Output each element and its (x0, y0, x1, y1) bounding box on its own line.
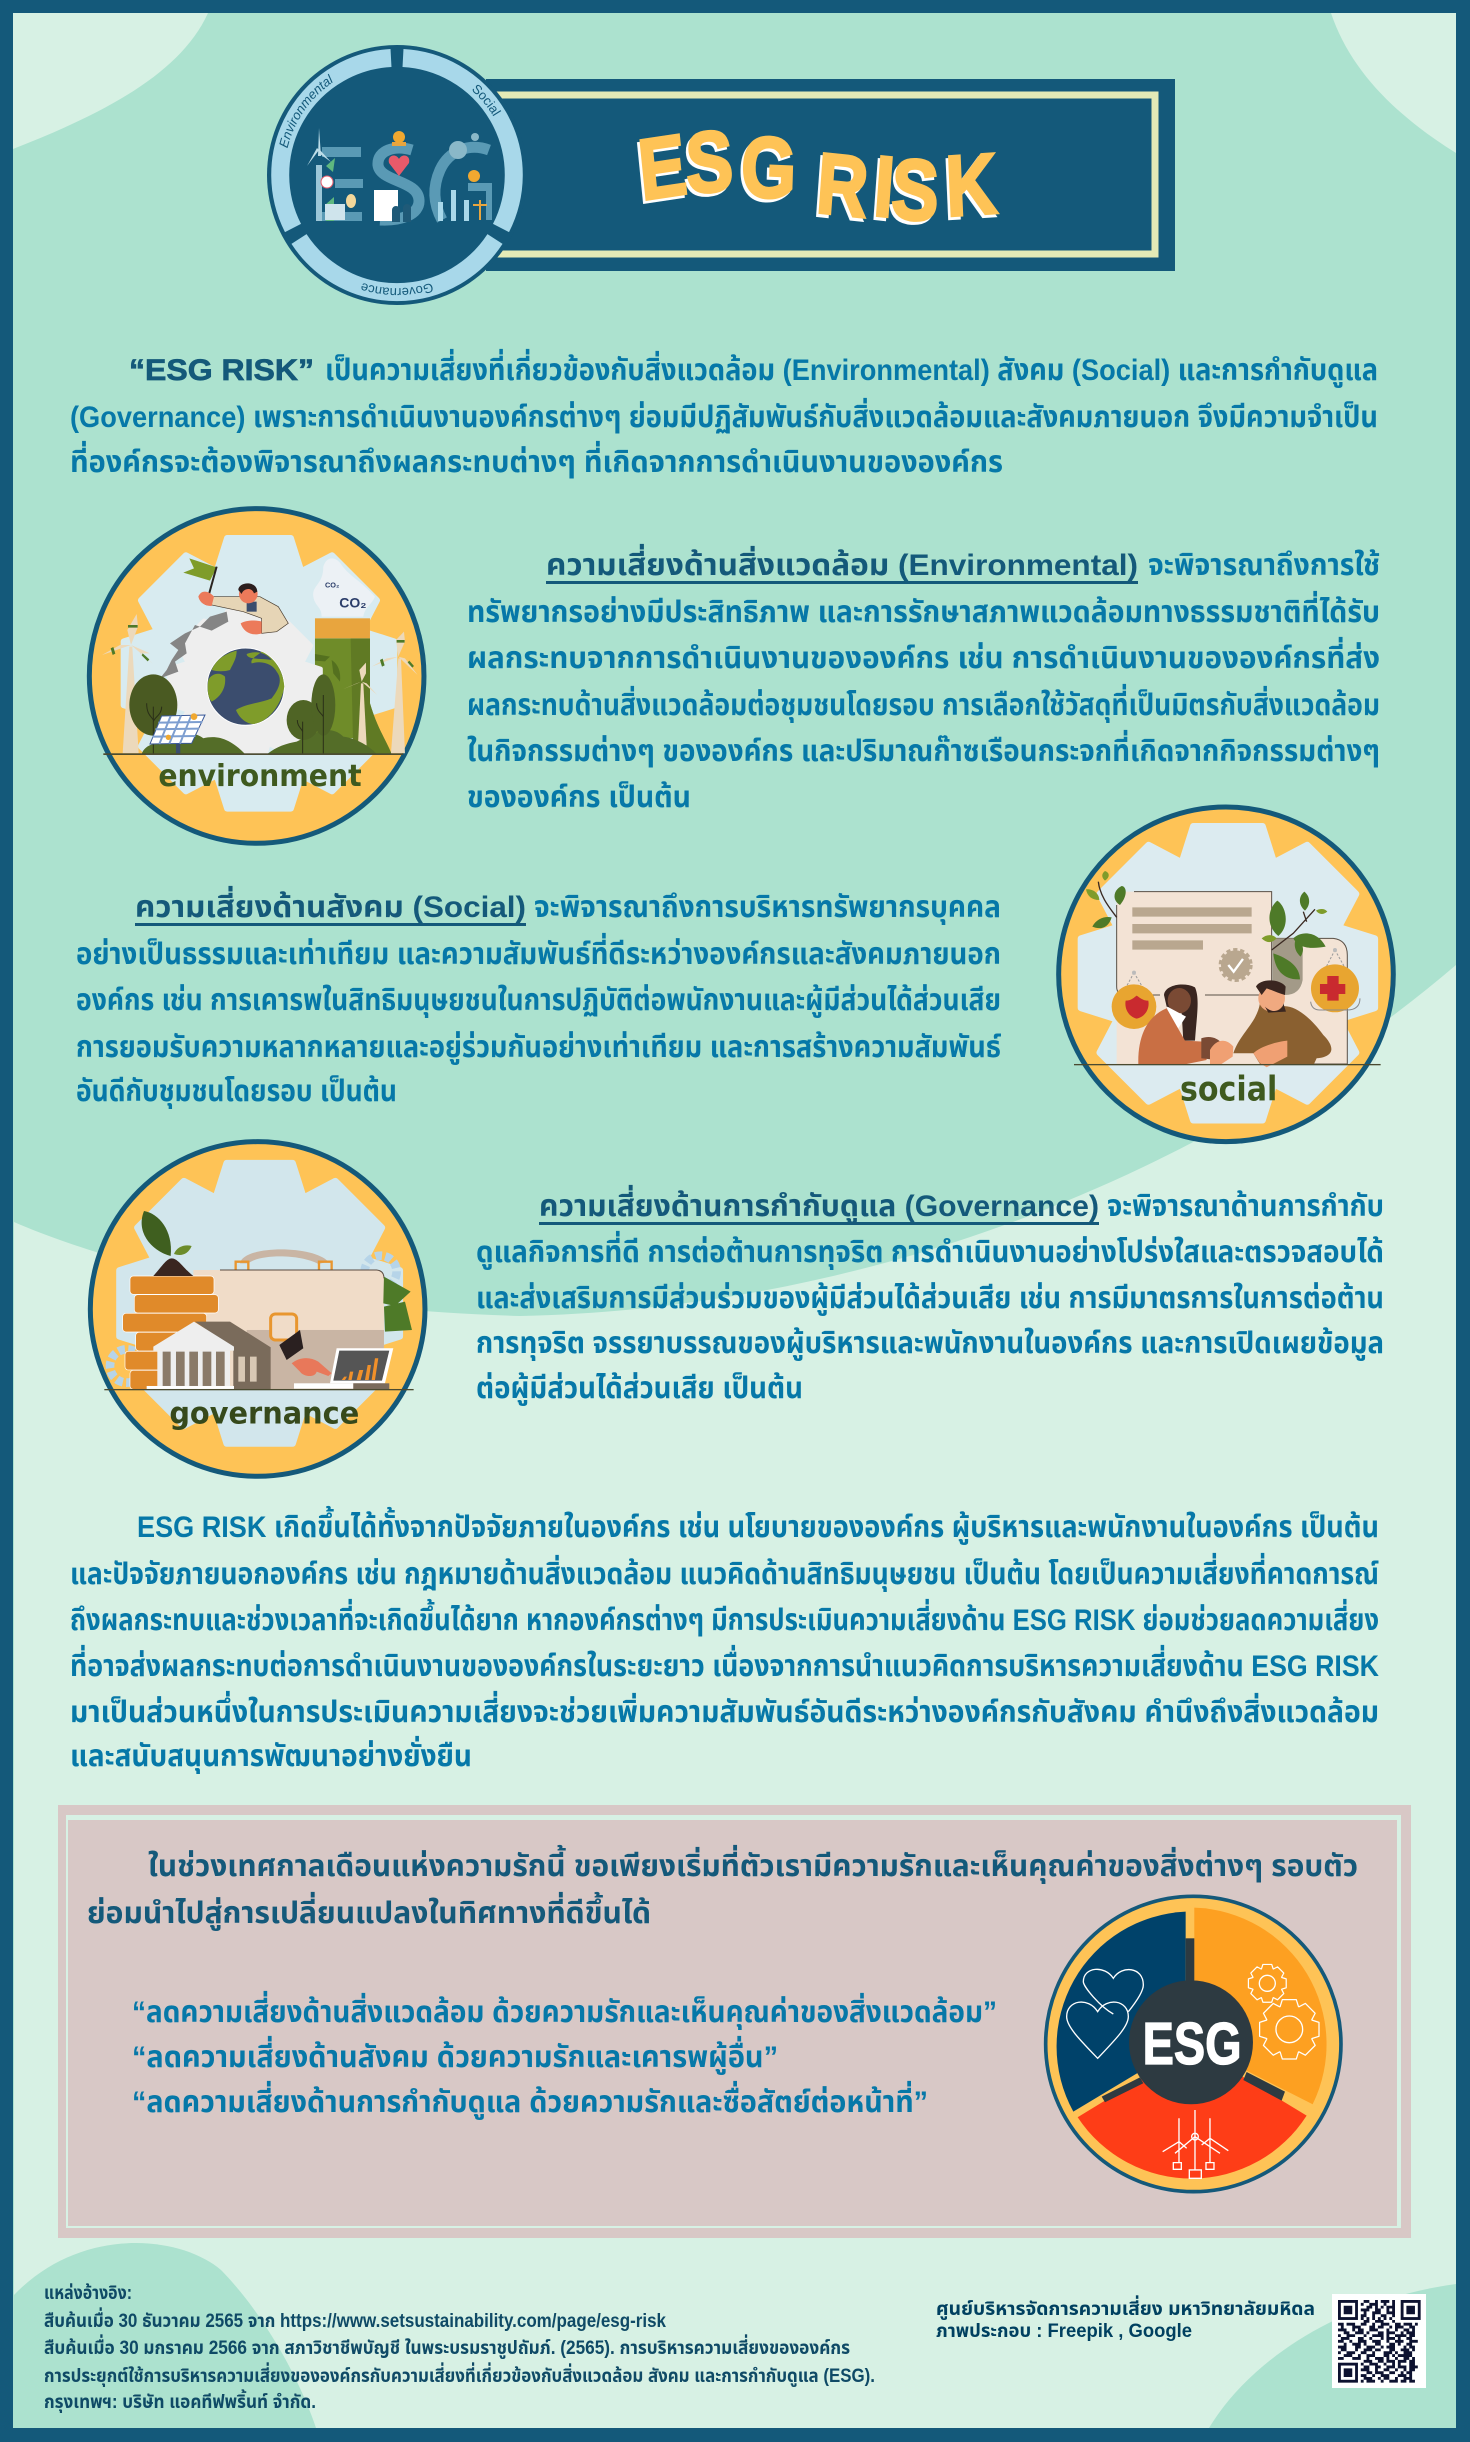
background gear (124, 538, 394, 808)
environment section text (467, 543, 1380, 814)
governance section text: การทุจริต จรรยาบรรณของผู้บริหารและพนักงานในองค์กร และการเปิดเผยข้อมูล (476, 1327, 1384, 1361)
medal: shield (1112, 971, 1156, 1029)
title text: ESG RISK: ESG RISK (634, 112, 999, 240)
quotes: “ลดความเสี่ยงด้านสังคม ด้วยความรักและเคารพผู้อื่น” (132, 2035, 778, 2075)
social section text: อันดีกับชุมชนโดยรอบ เป็นต้น (76, 1075, 397, 1109)
chimney (315, 618, 392, 754)
ring arcs (280, 58, 514, 292)
governance section text: ต่อผู้มีส่วนได้ส่วนเสีย เป็นต้น (476, 1372, 803, 1406)
social section text: การยอมรับความหลากหลายและอยู่ร่วมกันอย่างเท่าเทียม และการสร้างความสัมพันธ์ (76, 1031, 1001, 1065)
bank building (147, 1322, 271, 1389)
label: social: social (1180, 1070, 1277, 1110)
closing statement (87, 1844, 1358, 1931)
banknotes (383, 1277, 412, 1332)
references: สืบค้นเมื่อ 30 มกราคม 2566 จาก สภาวิชาชีพบัญชี ในพระบรมราชูปถัมภ์. (2565). การบริหารความเสี่ยงขององค์กร (44, 2334, 850, 2359)
references: การประยุกต์ใช้การบริหารความเสี่ยงขององค์กรกับความเสี่ยงที่เกี่ยวข้องกับสิ่งแวดล้อม สังคม และการกำกับดูแล (ESG). (44, 2362, 875, 2387)
environment section text: ขององค์กร เป็นต้น (467, 781, 691, 814)
intro paragraph: (Governance) เพราะการดำเนินงานองค์กรต่างๆ ย่อมมีปฏิสัมพันธ์กับสิ่งแวดล้อมและสังคมภายนอก จึงมีความจำเป็น (70, 397, 1378, 434)
quotes (132, 1990, 997, 2120)
social section text: จะพิจารณาถึงการบริหารทรัพยากรบุคคล (534, 891, 1001, 925)
environment section text: ทรัพยากรอย่างมีประสิทธิภาพ และการรักษาสภาพแวดล้อมทางธรรมชาติที่ได้รับ (467, 590, 1380, 629)
intro paragraph: ที่องค์กรจะต้องพิจารณาถึงผลกระทบต่างๆ ที่เกิดจากการดำเนินงานขององค์กร (70, 440, 1003, 479)
governance section text: จะพิจารณาด้านการกำกับ (1107, 1190, 1384, 1223)
smoke cloud (313, 558, 375, 617)
social section text: องค์กร เช่น การเคารพในสิทธิมนุษยชนในการปฏิบัติต่อพนักงานและผู้มีส่วนได้ส่วนเสีย (76, 984, 1001, 1018)
references: สืบค้นเมื่อ 30 ธันวาคม 2565 จาก https://www.setsustainability.com/page/esg-risk (44, 2307, 666, 2332)
blue segment: hearts (1057, 1912, 1186, 2112)
governance section text (476, 1184, 1384, 1406)
dark spokes and hub (1102, 1938, 1285, 2104)
ground line (104, 1389, 414, 1390)
background gear (120, 1163, 400, 1443)
laptop (294, 1348, 393, 1389)
letter E with turbine (307, 128, 363, 221)
ring label: Governance: Governance (362, 283, 433, 296)
ring label: Social: Social (472, 84, 502, 116)
credits: ภาพประกอบ : Freepik , Google (936, 2321, 1192, 2342)
woman (1138, 985, 1222, 1064)
certificate (1117, 892, 1272, 1064)
closing statement: ย่อมนำไปสู่การเปลี่ยนแปลงในทิศทางที่ดีขึ้นได้ (87, 1891, 651, 1931)
vase and plants (1086, 871, 1327, 995)
heading: social: ความเสี่ยงด้านสังคม (Social) (135, 885, 526, 924)
environment section text: ในกิจกรรมต่างๆ ขององค์กร และปริมาณก๊าซเรือนกระจกที่เกิดจากกิจกรรมต่างๆ (467, 729, 1380, 768)
intro paragraph (70, 348, 1378, 479)
ESG wheel (1046, 1896, 1341, 2192)
quotes: “ลดความเสี่ยงด้านการกำกับดูแล ด้วยความรักและซื่อสัตย์ต่อหน้าที่” (132, 2080, 928, 2120)
illustration: governance (90, 1142, 425, 1476)
grey-white gear with globe (160, 611, 321, 762)
title banner (480, 79, 1175, 271)
heading: governance: ความเสี่ยงด้านการกำกับดูแล (Governance) (539, 1184, 1099, 1224)
credits: ศูนย์บริหารจัดการความเสี่ยง มหาวิทยาลัยมหิดล (936, 2295, 1315, 2320)
governance section text: และส่งเสริมการมีส่วนร่วมของผู้มีส่วนได้ส่วนเสีย เช่น การมีมาตรการในการต่อต้าน (476, 1282, 1384, 1316)
smoke cloud: CO₂ (325, 581, 339, 590)
stacked coins (123, 1276, 220, 1389)
social section text: อย่างเป็นธรรมและเท่าเทียม และความสัมพันธ์ที่ดีระหว่างองค์กรและสังคมภายนอก (76, 932, 1001, 971)
environment section text: ผลกระทบจากการดำเนินงานขององค์กร เช่น การดำเนินงานขององค์กรที่ส่ง (467, 636, 1380, 675)
pointing hand (279, 1330, 303, 1360)
letter S with heart and people (374, 131, 419, 222)
letter G with gears and chart (435, 133, 492, 221)
background gear (1081, 827, 1374, 1120)
closing statement: ในช่วงเทศกาลเดือนแห่งความรักนี้ ขอเพียงเริ่มที่ตัวเรามีความรักและเห็นคุณค่าของสิ่งต่างๆ รอบตัว (148, 1844, 1358, 1884)
credits (936, 2295, 1315, 2342)
references: กรุงเทพฯ: บริษัท แอคทีฟพริ้นท์ จำกัด. (44, 2389, 316, 2413)
ESG RISK explanation paragraph: และสนับสนุนการพัฒนาอย่างยั่งยืน (70, 1735, 472, 1774)
ESG hub label: ESG (1143, 2010, 1242, 2077)
medal: cross (1311, 948, 1360, 1012)
solar panel (150, 713, 205, 754)
smoke cloud: CO₂ (339, 594, 367, 610)
environment section text: จะพิจารณาถึงการใช้ (1148, 549, 1380, 582)
environment section text: ผลกระทบด้านสิ่งแวดล้อมต่อชุมชนโดยรอบ การเลือกใช้วัสดุที่เป็นมิตรกับสิ่งแวดล้อม (467, 683, 1380, 723)
person with flag (183, 558, 288, 634)
wind turbines (102, 614, 418, 753)
ring label: Environmental: Environmental (279, 74, 332, 148)
label: governance: governance (169, 1396, 359, 1431)
QR code (1332, 2294, 1426, 2388)
social section text (76, 885, 1001, 1109)
ESG RISK explanation paragraph: มาเป็นส่วนหนึ่งในการประเมินความเสี่ยงจะช่วยเพิ่มความสัมพันธ์อันดีระหว่างองค์กรกับสังคม คำนึงถึงสิ่งแวดล้อม (70, 1690, 1379, 1729)
governance section text: ดูแลกิจการที่ดี การต่อต้านการทุจริต การดำเนินงานอย่างโปร่งใสและตรวจสอบได้ (476, 1230, 1384, 1270)
illustration: social (1059, 807, 1393, 1142)
illustration: environment (89, 509, 424, 843)
references (44, 2282, 875, 2413)
ESG logo badge (267, 45, 523, 305)
intro paragraph: เป็นความเสี่ยงที่เกี่ยวข้องกับสิ่งแวดล้อม (Environmental) สังคม (Social) และการกำกับดูแล (325, 348, 1378, 388)
panel: closing message (58, 1805, 1411, 2238)
second panel (1273, 938, 1347, 1064)
trees and bushes (129, 674, 377, 754)
briefcase (193, 1249, 384, 1389)
ground line (1074, 1064, 1381, 1065)
intro paragraph: “ESG RISK” (129, 354, 314, 387)
ESG RISK explanation paragraph (70, 1505, 1379, 1774)
quotes: “ลดความเสี่ยงด้านสิ่งแวดล้อม ด้วยความรักและเห็นคุณค่าของสิ่งแวดล้อม” (132, 1990, 997, 2030)
plant on soil (142, 1211, 193, 1276)
man (1210, 980, 1331, 1067)
orange segment: gears (1194, 1908, 1327, 2104)
red segment: turbines (1078, 2047, 1307, 2179)
heading: environmental: ความเสี่ยงด้านสิ่งแวดล้อม (Environmental) (546, 543, 1138, 582)
label: environment: environment (158, 759, 362, 794)
small gears (110, 1256, 397, 1383)
ground line (103, 753, 403, 755)
references: แหล่งอ้างอิง: (44, 2282, 132, 2304)
